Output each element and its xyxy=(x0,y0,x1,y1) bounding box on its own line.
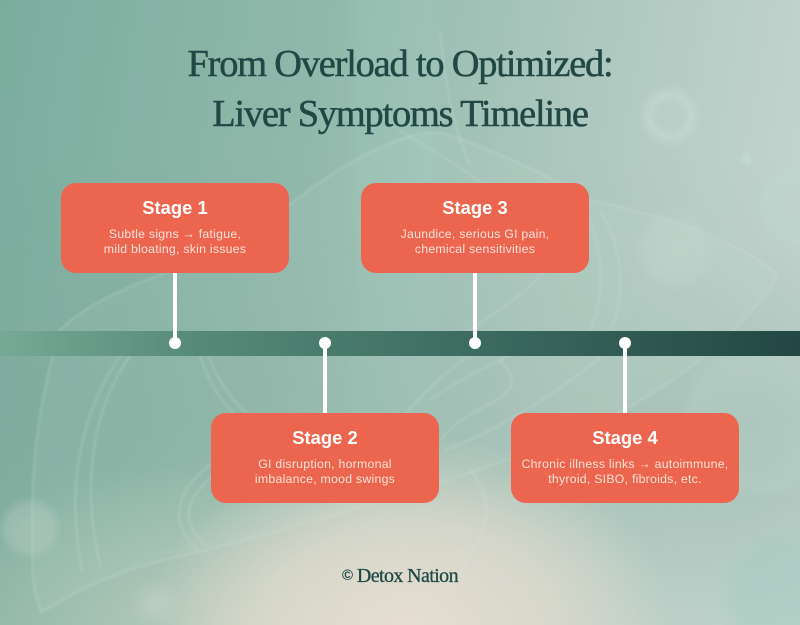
stage 2 card: imbalance, mood swings xyxy=(255,472,395,486)
stage 3 marker xyxy=(469,337,481,349)
stage 3 xyxy=(361,183,589,349)
stage 1 card xyxy=(61,183,289,273)
stage 2 card: Stage 2 xyxy=(292,427,358,448)
stage 2 marker xyxy=(319,337,331,349)
stage 3 connector xyxy=(473,273,477,343)
stage 4 connector xyxy=(623,343,627,413)
stage 4 card: Chronic illness links → autoimmune, xyxy=(522,457,728,471)
stage 3 card: Stage 3 xyxy=(442,197,508,218)
timeline bar xyxy=(0,331,800,356)
stage 1 xyxy=(61,183,289,349)
stage 4 card: Stage 4 xyxy=(592,427,658,448)
title: Liver Symptoms Timeline xyxy=(212,93,588,135)
stage 4 card xyxy=(511,413,739,503)
stage 1 card: Stage 1 xyxy=(142,197,208,218)
stage 2 card xyxy=(211,413,439,503)
stage 4 marker xyxy=(619,337,631,349)
stage 3 card xyxy=(361,183,589,273)
logo: Detox Nation xyxy=(342,565,458,587)
stage 3 card: Jaundice, serious GI pain, xyxy=(401,227,549,241)
stage 4 xyxy=(511,337,739,503)
stage 1 marker xyxy=(169,337,181,349)
stage 2 xyxy=(211,337,439,503)
stage 3 card: chemical sensitivities xyxy=(415,242,535,256)
stage 2 card: GI disruption, hormonal xyxy=(258,457,392,471)
title xyxy=(187,43,612,135)
stage 1 card: mild bloating, skin issues xyxy=(104,242,246,256)
brand name: Detox Nation xyxy=(357,565,458,587)
icon: copyright: © xyxy=(342,567,353,584)
title: From Overload to Optimized: xyxy=(187,43,612,85)
stage 1 card: Subtle signs → fatigue, xyxy=(109,227,241,241)
stage 2 connector xyxy=(323,343,327,413)
stage 4 card: thyroid, SIBO, fibroids, etc. xyxy=(548,472,702,486)
stage 1 connector xyxy=(173,273,177,343)
